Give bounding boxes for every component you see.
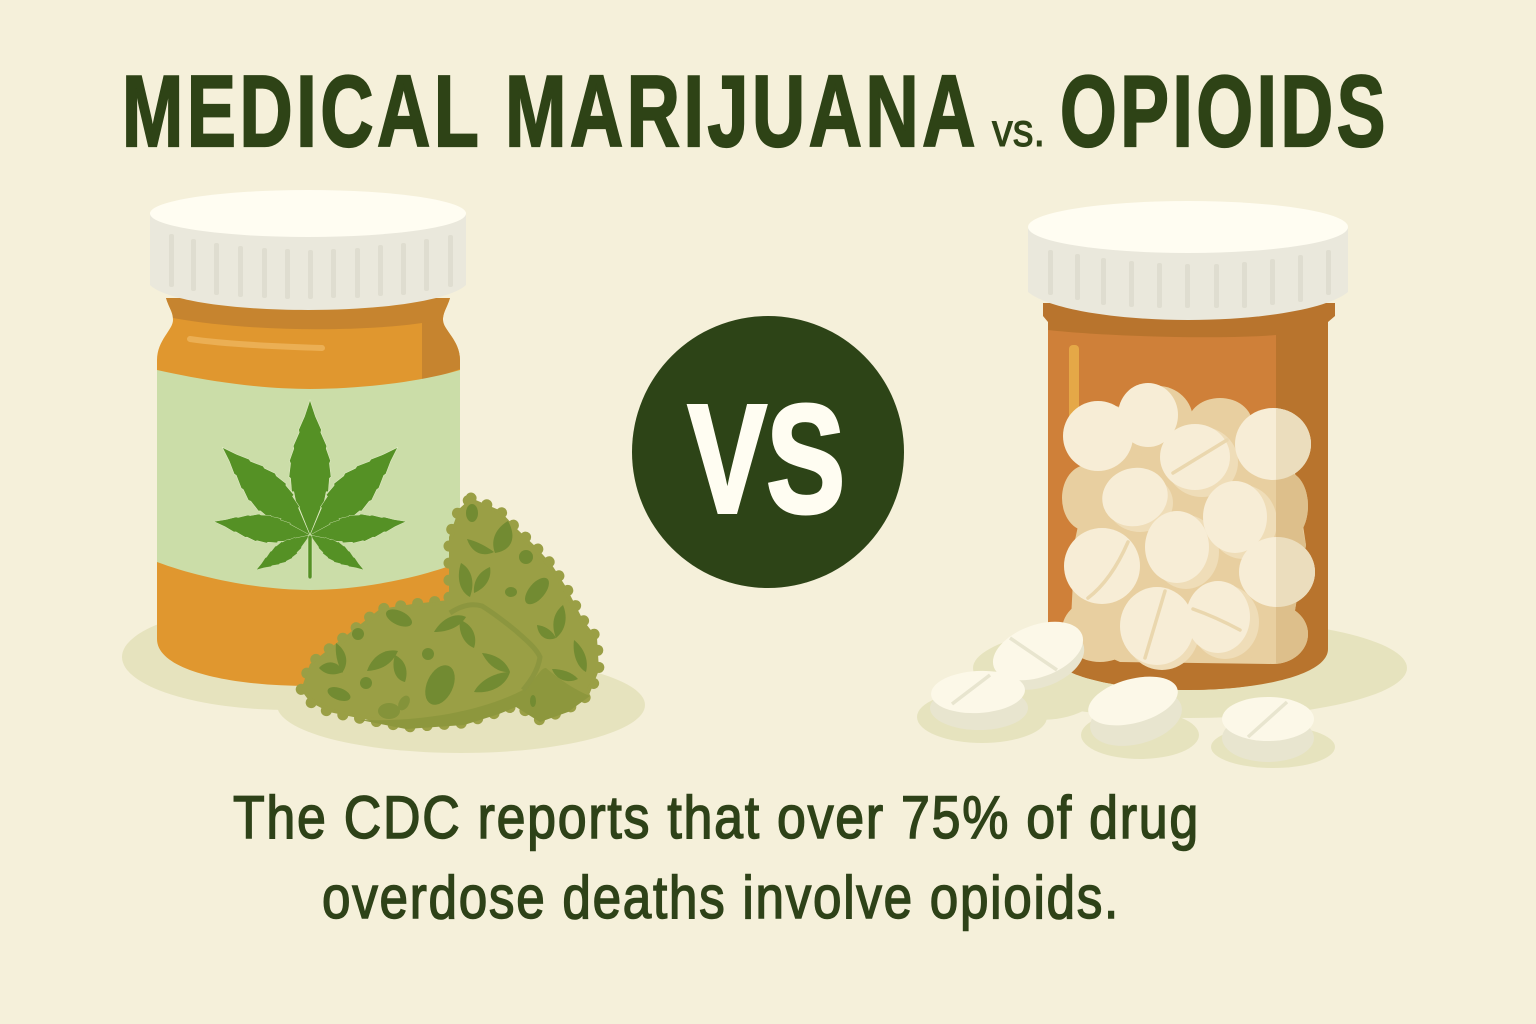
white bottle lid (1028, 201, 1348, 320)
green label (157, 370, 460, 590)
infographic canvas (122, 74, 1407, 932)
cannabis bud (301, 498, 599, 729)
vs badge: VS (688, 373, 845, 545)
bud ground shadow (277, 657, 645, 753)
loose pill: upper left (985, 610, 1092, 701)
pills inside bottle (1062, 383, 1315, 670)
vs badge (632, 316, 904, 588)
caption text (233, 784, 1200, 931)
pill ground shadows (917, 660, 1335, 768)
icon: cannabis leaf (209, 400, 411, 579)
title: OPIOIDS (1060, 56, 1389, 168)
mid layer pill edges (1107, 427, 1277, 670)
back layer pills (1062, 386, 1308, 664)
loose pill: center (1083, 668, 1188, 755)
amber bottle body (1043, 303, 1335, 690)
front layer pills (1063, 383, 1315, 665)
pill score lines (1088, 440, 1240, 658)
illustration: marijuana jar and bud (122, 190, 645, 753)
caption text: overdose deaths involve opioids. (322, 864, 1120, 931)
loose pill: right (1222, 697, 1314, 762)
loose pill: lower left (930, 669, 1028, 730)
orange jar body (157, 298, 460, 686)
bottle shade over pills (1276, 408, 1315, 664)
illustration: opioid bottle and pills (917, 201, 1407, 768)
title: vs. (992, 104, 1045, 156)
title: MEDICAL MARIJUANA (122, 56, 979, 168)
caption text: The CDC reports that over 75% of drug (233, 784, 1200, 851)
bottle ground shadow (973, 618, 1407, 718)
white jar lid (150, 190, 466, 310)
jar ground shadow (122, 604, 458, 710)
